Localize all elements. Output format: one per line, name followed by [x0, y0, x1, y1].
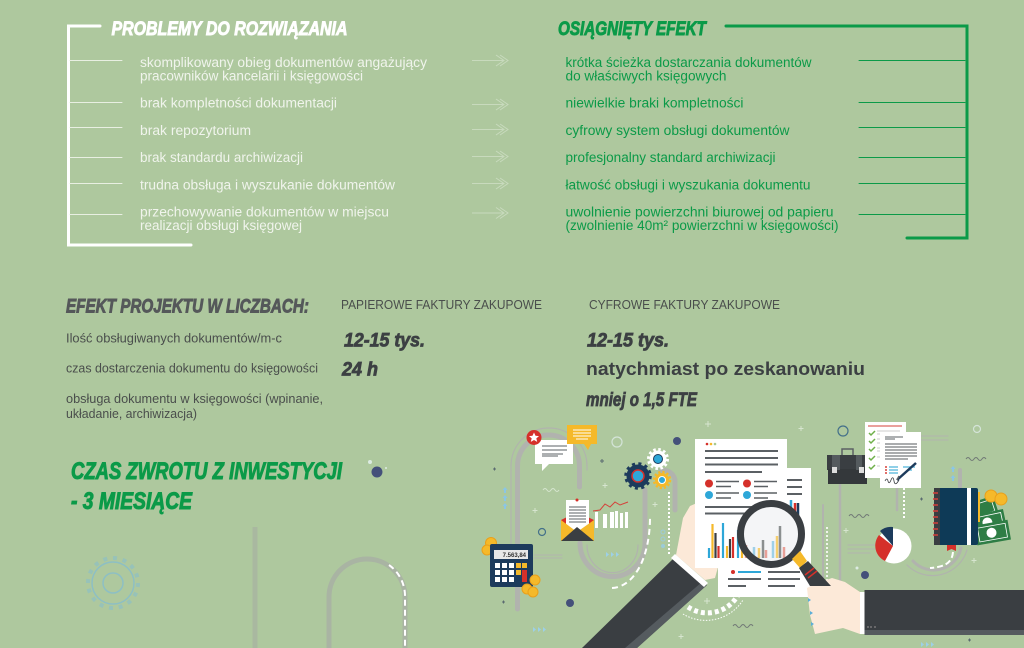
- callout: payback time: - 3 MIESIĄCE: [71, 488, 193, 515]
- list: effects: łatwość obsługi i wyszukania dokumentu: [566, 178, 810, 192]
- icon: briefcase: [827, 449, 867, 484]
- list: effects: krótka ścieżka dostarczania dokumentów: [566, 55, 812, 70]
- icon: gears: [626, 450, 670, 488]
- small decorative dots: [493, 421, 986, 647]
- values: digital: [586, 331, 865, 411]
- list: effects: profesjonalny standard archiwizacji: [566, 150, 776, 165]
- list: problems: trudna obsługa i wyszukanie dokumentów: [140, 178, 395, 192]
- list: effects: uwolnienie powierzchni biurowej od papieru: [566, 205, 834, 220]
- document: second sheet: [718, 468, 811, 597]
- list: problems: pracowników kancelarii i księgowości: [140, 69, 363, 84]
- icon: left sleeve: [582, 554, 708, 648]
- bracket: effects: [726, 26, 967, 238]
- illustration: business documents: [482, 421, 1024, 648]
- row labels: Ilość obsługiwanych dokumentów/m-c: [66, 331, 282, 346]
- list: effects: [566, 55, 838, 233]
- list: effects: cyfrowy system obsługi dokumentów: [566, 123, 790, 138]
- chart: pie: [875, 527, 912, 564]
- decoration: lower-left shapes: [88, 460, 405, 648]
- heading: results: EFEKT PROJEKTU W LICZBACH:: [66, 296, 309, 318]
- dashed white tracks: [612, 488, 953, 620]
- list: problems: skomplikowany obieg dokumentów angażujący: [140, 55, 427, 70]
- panel: project results in numbers: [66, 296, 865, 421]
- values: digital: 12-15 tys.: [587, 331, 669, 352]
- icon: envelope with letter and chart: [561, 498, 628, 541]
- list: effects: do właściwych księgowych: [566, 69, 726, 84]
- values: paper: 12-15 tys.: [344, 331, 425, 352]
- list: effects: niewielkie braki kompletności: [566, 96, 744, 111]
- row labels: układanie, archiwizacja): [66, 406, 197, 421]
- values: digital: mniej o 1,5 FTE: [586, 390, 698, 411]
- row labels: [66, 331, 323, 421]
- icon: right hand and sleeve: [807, 578, 1024, 635]
- panel: effects: [558, 19, 967, 238]
- icon: calculator and coins: 7.563,84: [503, 553, 527, 559]
- values: digital: natychmiast po zeskanowaniu: [586, 359, 865, 379]
- document: report with charts: [695, 439, 787, 568]
- list: problems: [140, 55, 427, 233]
- callout: payback time: [71, 458, 343, 515]
- icon: notebook and money: [933, 488, 1011, 551]
- icon: left hand: [676, 503, 720, 580]
- values: paper: [341, 331, 425, 381]
- row labels: czas dostarczenia dokumentu do księgowości: [66, 361, 318, 376]
- icon: checklist and signed document: [865, 422, 921, 488]
- list: problems: brak kompletności dokumentacji: [140, 96, 337, 111]
- list: problems: realizacji obsługi księgowej: [140, 218, 302, 233]
- bracket: problems: [68, 26, 191, 245]
- callout: payback time: CZAS ZWROTU Z INWESTYCJI: [71, 458, 343, 485]
- list: effects: (zwolnienie 40m² powierzchni w księgowości): [566, 218, 838, 233]
- arrows between problems and effects: [472, 55, 508, 218]
- list: problems: przechowywanie dokumentów w miejscu: [140, 205, 389, 220]
- row labels: obsługa dokumentu w księgowości (wpinanie,: [66, 391, 323, 406]
- column header: digital: CYFROWE FAKTURY ZAKUPOWE: [589, 297, 780, 312]
- icon: magnifying glass: [740, 504, 831, 586]
- heading: problems: PROBLEMY DO ROZWIĄZANIA: [112, 19, 348, 40]
- list: problems: brak repozytorium: [140, 123, 251, 138]
- list: problems: brak standardu archiwizacji: [140, 150, 303, 165]
- column header: paper: PAPIEROWE FAKTURY ZAKUPOWE: [341, 297, 542, 312]
- tracks: [511, 428, 967, 609]
- icon: calculator and coins: [482, 538, 540, 597]
- heading: effects: OSIĄGNIĘTY EFEKT: [558, 19, 707, 40]
- icon: speech bubbles: [526, 425, 597, 471]
- values: paper: 24 h: [341, 360, 378, 381]
- panel: problems: [68, 19, 427, 245]
